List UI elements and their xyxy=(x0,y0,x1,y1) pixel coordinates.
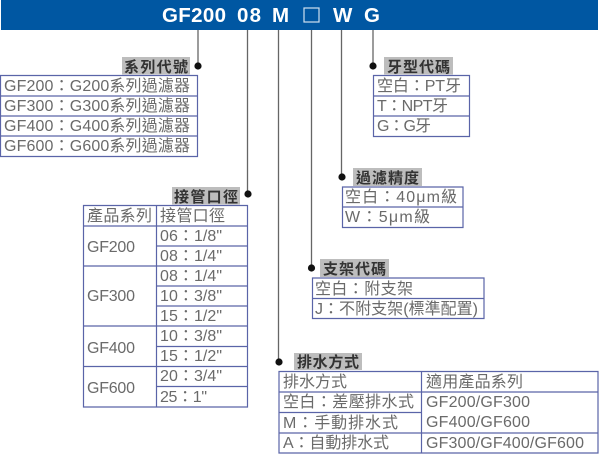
panel: drain type table: GF200/GF300 xyxy=(426,394,530,411)
panel: drain type table: A：自動排水式 xyxy=(283,434,389,452)
panel: drain type table: 空白：差壓排水式 xyxy=(283,393,414,411)
connector: filter precision xyxy=(338,30,346,181)
panel: port size table: 接管口徑 xyxy=(174,188,238,206)
panel: port size table: 接管口徑 xyxy=(160,206,225,225)
panel: port size table xyxy=(84,187,248,407)
panel: port size table: 20：3/4" xyxy=(160,368,222,385)
connector: drain type xyxy=(275,30,283,366)
panel: series code: GF300：G300系列過濾器 xyxy=(4,97,190,115)
panel: drain type table: 適用產品系列 xyxy=(426,373,523,391)
panel: bracket code: 空白：附支架 xyxy=(315,280,413,298)
panel: drain type table: 排水方式 xyxy=(283,373,347,391)
panel: port size table: 08：1/4" xyxy=(160,248,222,265)
header bar: model code: G xyxy=(364,4,380,27)
panel: bracket code: 支架代碼 xyxy=(323,260,386,278)
panel: thread type code: G：G牙 xyxy=(377,118,431,135)
panel: filter precision: 空白：40μm級 xyxy=(345,188,457,206)
panel: series code: GF600：G600系列過濾器 xyxy=(4,137,190,155)
connector: bracket code xyxy=(308,30,315,272)
panel: port size table: GF300 xyxy=(87,288,135,305)
header bar: model code: 08 xyxy=(237,4,261,27)
panel: thread type code: 牙型代碼 xyxy=(387,59,450,76)
panel: port size table: 產品系列 xyxy=(87,207,152,225)
panel: port size table: 08：1/4" xyxy=(160,268,222,285)
panel: thread type code: 空白：PT牙 xyxy=(377,77,461,95)
panel: bracket code: J：不附支架(標準配置) xyxy=(315,300,478,318)
panel: port size table: 15：1/2" xyxy=(160,308,222,325)
header bar: model code: GF200 xyxy=(162,4,226,27)
panel: filter precision: 過濾精度 xyxy=(356,169,419,187)
panel: thread type code xyxy=(374,57,470,136)
panel: port size table: GF400 xyxy=(87,340,135,357)
panel: port size table: 10：3/8" xyxy=(160,328,222,345)
panel: port size table: GF200 xyxy=(87,239,135,256)
connector: series code xyxy=(194,30,202,70)
panel: series code: GF400：G400系列過濾器 xyxy=(4,117,190,135)
panel: thread type code: T：NPT牙 xyxy=(377,98,448,115)
header bar: model code: W xyxy=(333,4,353,27)
panel: port size table: 25：1" xyxy=(160,389,207,406)
header bar: model code: M xyxy=(272,4,289,27)
panel: bracket code xyxy=(312,259,484,318)
panel: series code: GF200：G200系列過濾器 xyxy=(4,77,190,95)
panel: series code: 系列代號 xyxy=(124,58,188,76)
panel: drain type table: 排水方式 xyxy=(297,353,359,371)
panel: port size table: 10：3/8" xyxy=(160,288,222,305)
panel: drain type table: GF400/GF600 xyxy=(426,414,530,431)
panel: drain type table: M：手動排水式 xyxy=(283,414,398,432)
connector: thread type xyxy=(369,30,377,70)
panel: port size table: 15：1/2" xyxy=(160,348,222,365)
panel: port size table: 06：1/8" xyxy=(160,228,222,245)
header bar: model code xyxy=(1,0,598,30)
panel: filter precision: W：5μm級 xyxy=(345,208,430,226)
panel: port size table: GF600 xyxy=(87,380,135,397)
connector: port size xyxy=(244,30,252,198)
panel: drain type table xyxy=(279,353,598,453)
panel: series code xyxy=(0,57,198,156)
panel: drain type table: GF300/GF400/GF600 xyxy=(426,435,584,452)
panel: filter precision xyxy=(342,168,463,228)
